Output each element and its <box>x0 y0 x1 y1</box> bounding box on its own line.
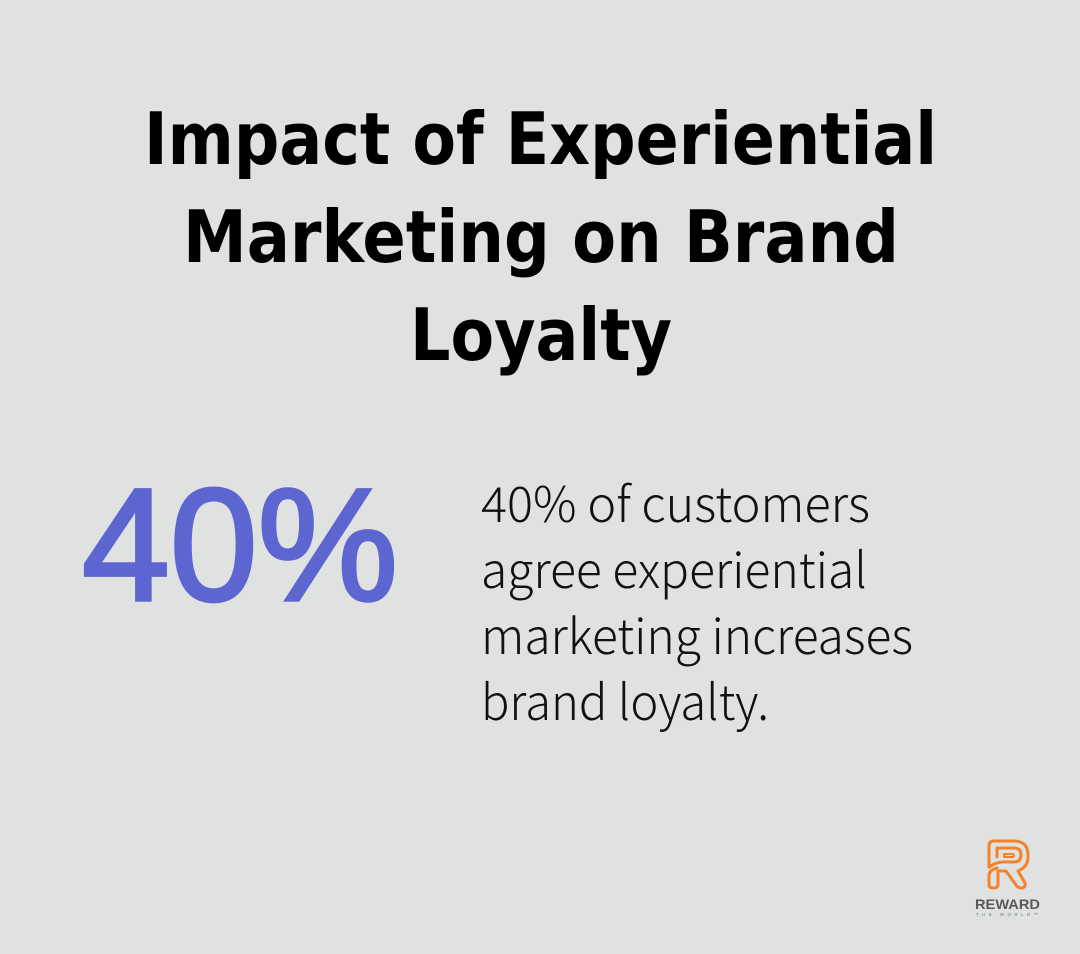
description text <box>481 466 913 735</box>
logo: Reward the World <box>975 841 1040 917</box>
logo wordmark: REWARD <box>975 896 1040 912</box>
description text: agree experiential <box>481 532 867 603</box>
title: Loyalty <box>410 293 672 377</box>
description text: marketing increases <box>481 598 913 669</box>
title: Marketing on Brand <box>183 195 899 279</box>
description text: brand loyalty. <box>481 664 769 735</box>
icon: orange R mark <box>989 841 1028 888</box>
big statistic: 40%: 40% <box>82 455 398 634</box>
title <box>144 97 937 377</box>
logo tagline: THE WORLD™ <box>976 912 1038 917</box>
description text: 40% of customers <box>481 466 870 537</box>
title: Impact of Experiential <box>144 97 937 181</box>
